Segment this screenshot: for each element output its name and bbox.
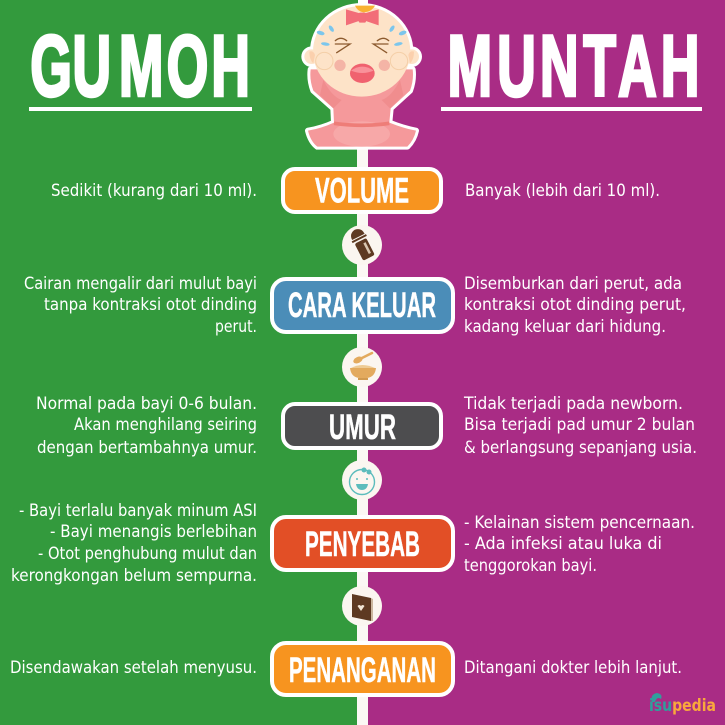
right text: umur <box>463 394 697 457</box>
row: volume <box>51 169 660 212</box>
heading: GUMOH: GUMOH <box>30 19 250 115</box>
center white spine <box>357 140 368 725</box>
right text: cara keluar: Disemburkan dari perut, ada <box>464 274 682 293</box>
left text: penyebab: - Bayi menangis berlebihan <box>50 522 257 541</box>
panel: green background gumoh <box>0 0 358 725</box>
left text: cara keluar: perut. <box>215 317 257 336</box>
right text: umur: Tidak terjadi pada newborn. <box>463 394 683 413</box>
right text: cara keluar: kontraksi otot dinding perut, <box>464 295 686 314</box>
pill: cara keluar <box>272 279 453 332</box>
pill: penyebab: PENYEBAB <box>305 525 420 564</box>
icon: baby bottle <box>342 225 382 265</box>
right text: umur: Bisa terjadi pad umur 2 bulan <box>464 415 695 434</box>
pill: umur <box>283 404 441 448</box>
right text: penyebab: - Kelainan sistem pencernaan. <box>464 513 695 532</box>
pill: penanganan: PENANGANAN <box>289 651 436 690</box>
pill: penyebab <box>272 517 453 570</box>
pill: cara keluar: CARA KELUAR <box>288 286 436 325</box>
icon: book with heart <box>342 586 382 626</box>
panel: purple background muntah <box>368 0 725 725</box>
left text: umur <box>36 394 257 457</box>
row: umur <box>36 394 697 457</box>
left text: umur: Normal pada bayi 0-6 bulan. <box>36 394 257 413</box>
left text: cara keluar <box>24 274 257 336</box>
row: cara keluar <box>24 274 686 336</box>
icon: baby face <box>342 460 382 500</box>
right text: penanganan: Ditangani dokter lebih lanjut. <box>464 658 682 677</box>
left text: penanganan: Disendawakan setelah menyusu. <box>10 658 257 677</box>
left text: penyebab: - Bayi terlalu banyak minum ASI <box>19 501 257 520</box>
row: penyebab <box>11 501 695 585</box>
left text: penyebab: - Otot penghubung mulut dan <box>38 544 257 563</box>
icon: crying baby <box>304 6 419 147</box>
right text: cara keluar <box>464 274 686 336</box>
heading: MUNTAH: MUNTAH <box>448 19 699 115</box>
right text: volume: Banyak (lebih dari 10 ml). <box>465 181 660 200</box>
icon: bowl and spoon <box>342 347 382 387</box>
left text: cara keluar: tanpa kontraksi otot dinding <box>44 295 257 314</box>
pill: penanganan <box>272 643 453 695</box>
pill: volume <box>283 169 441 212</box>
logo: isupedia: isupedia <box>649 696 716 715</box>
left text: penyebab <box>11 501 257 585</box>
right text: penyebab <box>464 513 695 575</box>
left text: penyebab: kerongkongan belum sempurna. <box>11 566 257 585</box>
left text: volume: Sedikit (kurang dari 10 ml). <box>51 181 257 200</box>
right text: penyebab: tenggorokan bayi. <box>464 556 597 575</box>
left text: umur: dengan bertambahnya umur. <box>37 438 257 457</box>
right text: umur: & berlangsung sepanjang usia. <box>464 438 697 457</box>
right text: cara keluar: kadang keluar dari hidung. <box>464 317 666 336</box>
row: penanganan <box>10 643 682 695</box>
pill: umur: UMUR <box>329 408 396 447</box>
left text: umur: Akan menghilang seiring <box>74 415 257 434</box>
right text: penyebab: - Ada infeksi atau luka di <box>464 534 662 553</box>
left text: cara keluar: Cairan mengalir dari mulut bayi <box>24 274 257 293</box>
pill: volume: VOLUME <box>315 172 409 210</box>
